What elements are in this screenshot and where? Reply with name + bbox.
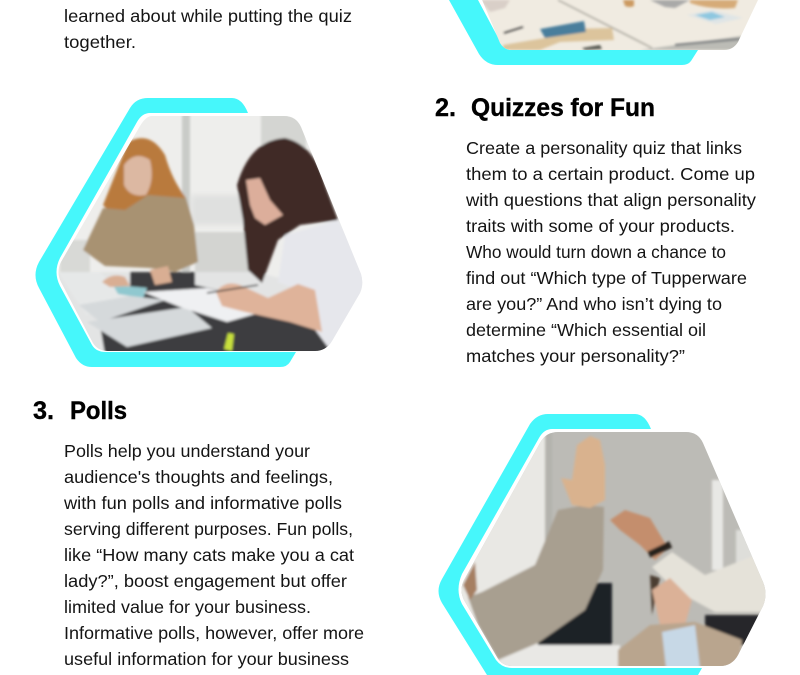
text block: Quizzes for Fun description: Create a personality quiz that links <box>466 138 742 158</box>
image: two women studying in hexagon frame <box>36 98 370 367</box>
tan shirt <box>83 195 198 272</box>
hands <box>102 275 130 287</box>
redhead hair <box>102 136 186 212</box>
right hand <box>610 510 668 560</box>
image: desk from above in hexagon frame <box>449 0 770 65</box>
blue shirt <box>662 625 700 668</box>
text block: Quizzes for Fun description: determine “Which essential oil <box>466 320 706 340</box>
photo: two women <box>50 110 370 355</box>
cyan hexagon frame <box>438 414 702 675</box>
photo: desk <box>482 0 758 50</box>
heading: 2. Quizzes for Fun: 2. <box>435 94 456 122</box>
left arm sleeve <box>468 505 604 660</box>
brunette face <box>246 178 283 225</box>
text block: Quizzes for Fun description: with questions that align personality <box>465 190 756 210</box>
text block: intro ending: learned about while putting the quiz <box>64 6 352 26</box>
cyan hexagon frame <box>36 98 296 367</box>
text block: Quizzes for Fun description: them to a certain product. Come up <box>466 164 755 184</box>
smiling woman's hair <box>650 575 660 615</box>
white t-shirt <box>282 218 362 348</box>
heading: 3. Polls: Polls <box>70 397 127 425</box>
text block: Quizzes for Fun description: find out “Which type of Tupperware <box>466 268 747 288</box>
text block: Polls description: limited value for your business. <box>64 597 311 617</box>
text block: Polls description: with fun polls and informative polls <box>63 493 342 513</box>
text block: Polls description <box>63 441 364 669</box>
left hand <box>561 436 605 508</box>
text block: Polls description: Informative polls, however, offer more <box>64 623 364 643</box>
text block: Quizzes for Fun description: Who would turn down a chance to <box>466 242 726 262</box>
text block: Polls description: Polls help you understand your <box>64 441 310 461</box>
text block: Quizzes for Fun description <box>465 138 756 366</box>
large notebook <box>87 307 212 347</box>
text block: Polls description: lady?”, boost engagement but offer <box>64 571 347 591</box>
brunette hair <box>237 138 338 283</box>
open notebook <box>143 286 256 324</box>
heading: 3. Polls: 3. <box>33 397 54 425</box>
text block: Polls description: like “How many cats make you a cat <box>64 545 354 565</box>
photo: high five <box>455 428 770 670</box>
text block: Quizzes for Fun description: are you?” And who isn’t dying to <box>466 294 722 314</box>
text block: Polls description: audience's thoughts and feelings, <box>64 467 333 487</box>
heading: 3. Polls <box>33 397 127 425</box>
cyan frame fragment <box>449 0 698 65</box>
text block: Polls description: serving different purposes. Fun polls, <box>64 519 353 539</box>
text block: intro ending <box>64 6 352 52</box>
face <box>124 156 152 196</box>
beige blazer <box>618 622 742 668</box>
face <box>652 578 692 628</box>
right arm sleeve <box>652 552 768 612</box>
left papers <box>58 272 147 315</box>
text block: Quizzes for Fun description: traits with some of your products. <box>466 216 735 236</box>
dark monitor <box>538 583 612 650</box>
brunette arm <box>216 284 322 332</box>
text block: Quizzes for Fun description: matches your personality?” <box>466 346 685 366</box>
image: colleagues high-fiving in hexagon frame <box>438 414 770 675</box>
table surface <box>60 270 288 351</box>
heading: 2. Quizzes for Fun: Quizzes for Fun <box>471 94 655 122</box>
text block: intro ending: together. <box>64 32 136 52</box>
text block: Polls description: useful information for your business <box>64 649 349 669</box>
